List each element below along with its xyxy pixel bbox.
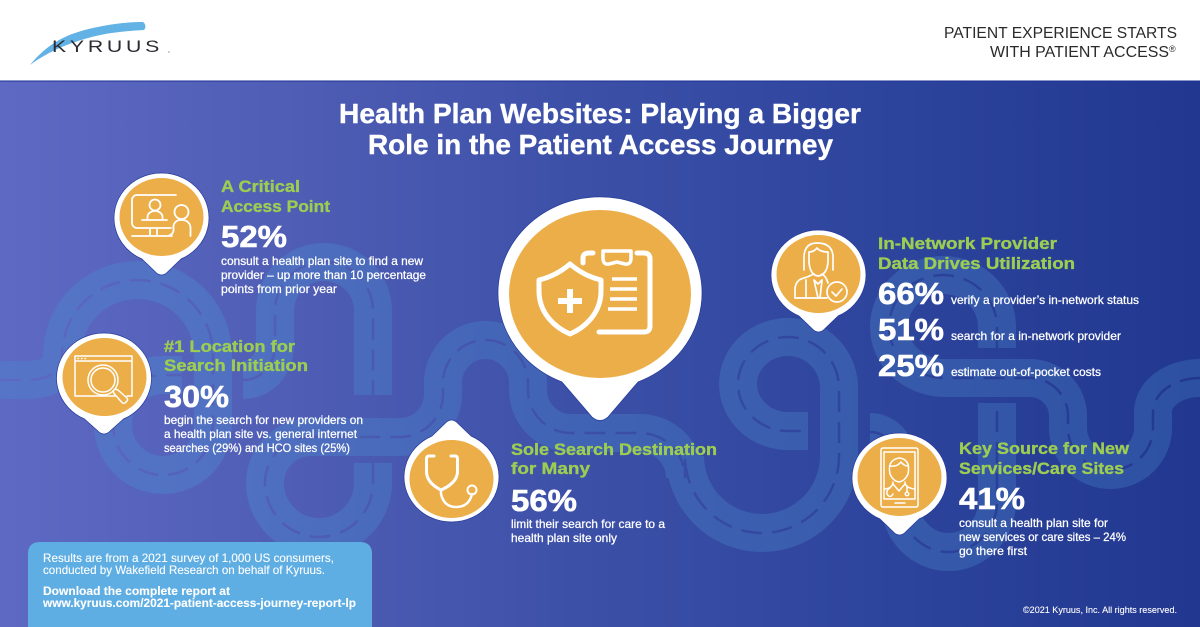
block: a critical access point [221,177,426,296]
tagline: WITH PATIENT ACCESS [990,44,1169,61]
stat 56%: 56% [511,483,577,518]
description: go there first [959,544,1028,558]
icon: doctor with check mark [795,243,847,302]
stat 51%: 51% [878,312,944,347]
heading: Sole Search Destination [511,440,717,459]
icon: stethoscope [426,456,476,507]
callout: survey source and download link: www.kyruus.com/2021-patient-access-journey-report-lp [42,596,356,610]
stat 25% [878,348,1101,383]
description: a health plan site vs. general internet [164,427,358,441]
stat 51%: search for a in-network provider [951,329,1121,343]
description: new services or care sites – 24% [959,530,1126,544]
block: in-network provider data [878,234,1139,383]
pin: video consult [114,173,209,275]
tagline: PATIENT EXPERIENCE STARTS [944,25,1177,42]
description: provider – up more than 10 percentage [221,268,426,282]
pin: browser search [57,333,152,434]
stat 66%: 66% [878,276,944,311]
heading: for Many [511,459,591,478]
stat 51% [878,312,1121,347]
description: consult a health plan site for [959,516,1108,530]
pin: tablet telehealth [852,433,947,535]
title: Health Plan Websites: Playing a Bigger [339,98,861,129]
description [221,254,426,296]
winding road background [0,262,1200,552]
pin: shield and clipboard [498,197,702,420]
description: health plan site only [511,531,617,545]
Kyruus logo: KYRUUS [52,37,163,56]
heading [511,440,717,478]
heading [959,439,1130,478]
pin: doctor [771,230,866,332]
stat 25%: estimate out-of-pocket costs [951,365,1101,379]
block: sole search destination [511,440,717,545]
callout: survey source and download link: conducted by Wakefield Research on behalf of Kyruus. [43,563,325,577]
heading: Services/Care Sites [959,459,1124,478]
tagline: ® [1169,44,1176,54]
copyright: ©2021 Kyruus, Inc. All rights reserved. [1023,605,1177,616]
title [339,98,861,160]
description [164,413,363,455]
callout: survey source and download link: Download the complete report at [43,584,230,598]
callout: survey source and download link [28,542,372,627]
description: searches (29%) and HCO sites (25%) [164,441,350,455]
heading: A Critical [221,177,300,196]
header bar [0,0,1200,81]
stat 66%: verify a provider’s in-network status [951,293,1139,307]
stat 25%: 25% [878,348,944,383]
heading [878,234,1075,273]
description: begin the search for new providers on [164,413,363,427]
block: location for search initiation [164,337,363,455]
stat 41%: 41% [959,481,1025,516]
stat 30%: 30% [164,379,229,414]
heading: In-Network Provider [878,234,1057,253]
heading: Search Initiation [164,356,308,375]
callout: survey source and download link: Results are from a 2021 survey of 1,000 US consumers, [43,551,334,565]
block: key source for new services [959,439,1130,558]
description: limit their search for care to a [511,517,665,531]
Kyruus logo [30,22,170,65]
heading [221,177,330,216]
title: Role in the Patient Access Journey [368,129,833,160]
description [511,517,665,545]
heading: Access Point [221,197,330,216]
description: points from prior year [221,282,337,296]
heading: Key Source for New [959,439,1130,458]
stat 52%: 52% [221,219,287,254]
icon: video consultation [132,195,190,236]
icon: tablet with doctor [881,448,918,507]
icon: shield and clipboard [539,251,650,334]
pin: stethoscope [404,420,499,522]
heading: #1 Location for [164,337,295,356]
tagline [944,25,1177,61]
icon: browser with magnifier [75,356,132,403]
stat 66% [878,276,1139,311]
heading [164,337,308,375]
description: consult a health plan site to find a new [221,254,423,268]
description [959,516,1126,558]
heading: Data Drives Utilization [878,254,1075,273]
